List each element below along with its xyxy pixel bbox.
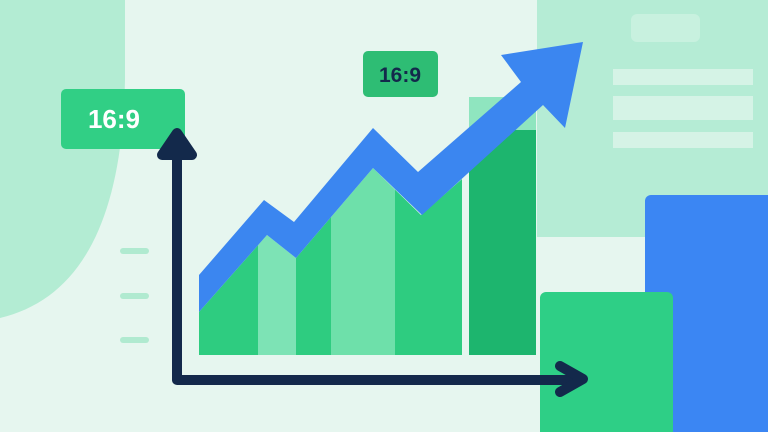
label: 16:9 left: 16:9 (88, 104, 140, 134)
label: 16:9 top (363, 51, 438, 97)
tick marks (120, 248, 149, 343)
background blob left (0, 0, 125, 318)
label: 16:9 left (61, 89, 185, 149)
panel: right background panel (537, 0, 768, 237)
label: 16:9 top: 16:9 (379, 64, 421, 87)
green block bottom right (540, 292, 673, 432)
bar chart (199, 97, 536, 355)
blue trend arrow (199, 42, 583, 312)
blue block right (645, 195, 768, 432)
axes arrows (162, 133, 583, 392)
